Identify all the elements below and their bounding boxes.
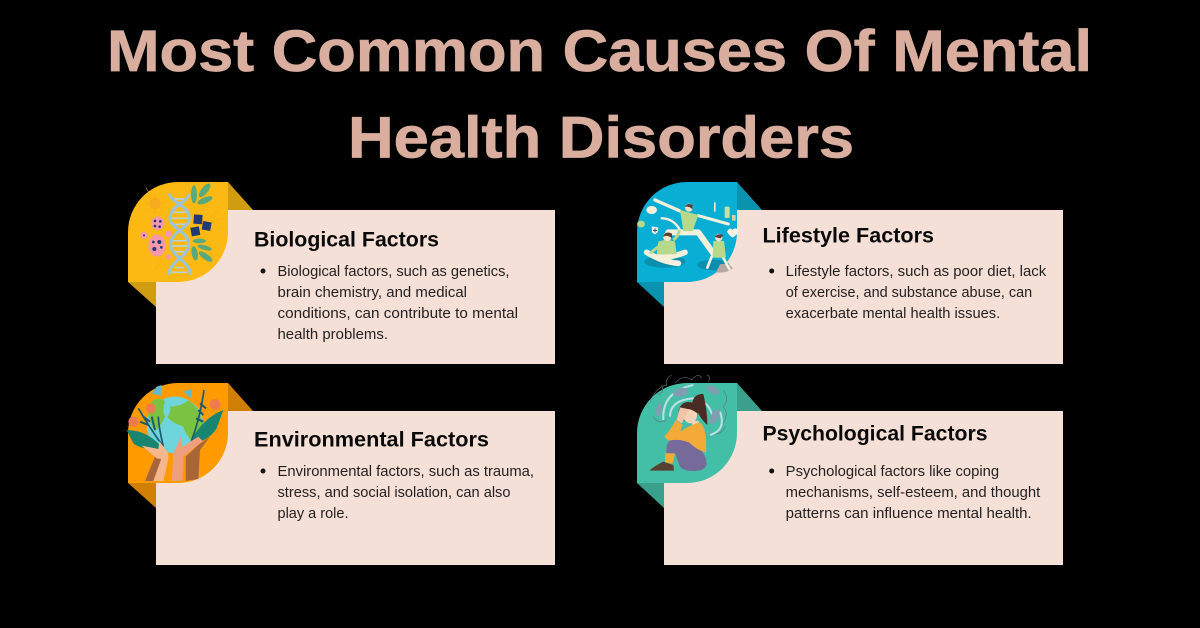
text block: environmental factors: play a role.	[278, 506, 348, 522]
text block: lifestyle factors	[769, 264, 1047, 322]
heading: lifestyle factors: Lifestyle Factors	[762, 224, 934, 248]
heading: environmental factors: Environmental Factors	[254, 428, 489, 452]
text block: environmental factors: Environmental factors, such as trauma,	[278, 464, 534, 480]
icon: dna and cells	[140, 182, 222, 275]
text block: biological factors	[260, 264, 518, 343]
text block: biological factors: health problems.	[278, 327, 388, 343]
text block: psychological factors	[769, 464, 1040, 522]
text block: environmental factors	[260, 464, 534, 522]
text block: lifestyle factors: exacerbate mental health issues.	[786, 306, 1000, 322]
panel: psychological factors	[637, 375, 1063, 565]
panel: lifestyle factors	[637, 182, 1063, 364]
panel: biological factors	[128, 182, 555, 364]
text block: environmental factors: stress, and social isolation, can also	[278, 485, 510, 501]
text block: psychological factors: Psychological factors like coping	[786, 464, 999, 480]
text block: psychological factors: mechanisms, self-esteem, and thought	[786, 485, 1040, 501]
text block: psychological factors: patterns can influence mental health.	[786, 506, 1032, 522]
icon: yoga family	[637, 200, 739, 273]
text block: biological factors: Biological factors, such as genetics,	[278, 264, 510, 280]
text block: lifestyle factors: of exercise, and substance abuse, can	[786, 285, 1032, 301]
text block: lifestyle factors: Lifestyle factors, such as poor diet, lack	[786, 264, 1047, 280]
text block: biological factors: conditions, can contribute to mental	[278, 306, 518, 322]
text block: biological factors: brain chemistry, and medical	[278, 285, 467, 301]
icon: hands holding earth	[127, 385, 223, 481]
title: Most Common Causes Of Mental	[107, 19, 1092, 84]
title	[107, 19, 1092, 170]
heading: biological factors: Biological Factors	[254, 228, 439, 252]
heading: psychological factors: Psychological Factors	[762, 422, 988, 446]
icon: distressed woman	[649, 375, 727, 471]
panel: environmental factors	[127, 383, 555, 565]
title: Health Disorders	[348, 106, 854, 170]
